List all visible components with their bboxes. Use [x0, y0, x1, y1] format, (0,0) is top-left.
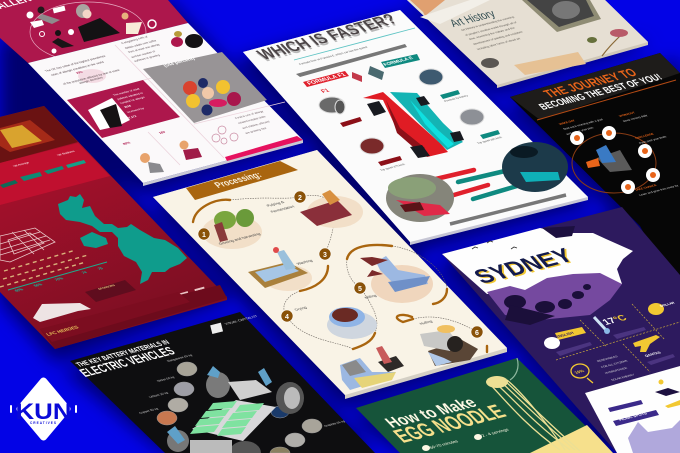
art history text: development of painting and sculpture [472, 30, 524, 46]
white map silhouette [442, 228, 633, 294]
language tag: english: ENGLISH [554, 331, 575, 339]
bottom right illustration and text [212, 110, 271, 144]
panel: processing [153, 150, 507, 399]
green axis and stats: 60% [13, 287, 25, 293]
sponsors box: SPONSORS [97, 284, 116, 291]
light bulb [571, 364, 593, 383]
step 4: drying [281, 305, 377, 339]
text block: prevalence: 20% [75, 70, 84, 75]
temperature: 17°C [600, 314, 630, 327]
heading: how to make: How to Make [381, 394, 481, 431]
step 2: pulping and fermentation: Fermentation [269, 204, 295, 214]
lower text [634, 132, 680, 197]
step 6: hulling machine: 6 [475, 330, 479, 337]
step 6: hulling machine: Hulling [418, 319, 434, 326]
material labels [138, 353, 346, 428]
lower text: CHALLENGE [634, 132, 655, 140]
green axis and stats [8, 262, 107, 293]
red stats band: UK Average [12, 161, 30, 168]
thin route lines [230, 195, 477, 349]
tag captions: Top speed 375 km/h [379, 162, 406, 172]
step 4: drying: 4 [285, 314, 289, 321]
green axis and stats: 56% [32, 282, 44, 288]
formula e label: FORMULA E [382, 56, 416, 67]
intro text: Keep moving daily [622, 114, 649, 123]
pink accent strip [225, 136, 303, 161]
coin and currency: DOLLAR [659, 301, 676, 308]
journey circle with icons [570, 126, 660, 194]
purple mountains [487, 273, 622, 320]
material labels: Copper 50 kg [138, 407, 159, 415]
crimson stats box [67, 80, 180, 138]
crimson stats box: increased by [126, 106, 146, 114]
white body [28, 23, 303, 183]
lower text: Push past your limits [638, 135, 668, 145]
text block: prevalence: The UK has some of the highest prevalence [44, 54, 107, 73]
tag captions: Powered by battery [443, 94, 470, 103]
art history text: Art History is understanding the meaning [460, 15, 515, 32]
bottom stat 160: 160 [158, 130, 166, 135]
step 5: milling machine: Milling [363, 293, 378, 300]
renewable energy text [596, 355, 636, 382]
photo: formula e car [502, 142, 568, 192]
textured header [510, 53, 680, 120]
bottom strip: lfc heroes [40, 285, 227, 349]
intro text: WAKE DAY [558, 119, 576, 126]
city buildings [628, 420, 680, 453]
head icons [171, 31, 203, 48]
panel: allergy infographic [0, 0, 303, 186]
heading ribbon: Processing: [212, 171, 265, 190]
renewable energy text: SOLAR ENERGY [610, 373, 636, 382]
qantas plane [633, 335, 675, 365]
material samples [157, 362, 322, 453]
step 4: drying: Drying [293, 305, 308, 312]
picnic spots: PICNIC SPOTS [617, 411, 648, 422]
brown route arcs [193, 200, 487, 352]
panel: how to make egg noodle [356, 358, 613, 453]
noodle head and fork [486, 358, 518, 388]
servings [474, 427, 511, 440]
renewable energy text: RENEWABLES [596, 355, 619, 363]
beetle [481, 58, 499, 68]
44 percent text: British adults now suffer [124, 39, 157, 50]
white lower section [585, 366, 680, 453]
44 percent text: sufferers is growing [133, 53, 161, 63]
material labels: Graphite 66 kg [323, 420, 346, 428]
bottom strip: lfc heroes: LFC HEROES [45, 325, 81, 337]
round photo thumbnails [319, 69, 484, 154]
crimson stats box: The number of adult [112, 87, 141, 97]
divider lines [68, 45, 285, 165]
sydney title: SYDNEY [471, 245, 581, 289]
red stats band: UK Stadiums [56, 149, 76, 157]
bottom right illustration and text: are growing fast [244, 126, 267, 135]
island and plane icons [655, 380, 680, 408]
step 1: growing and harvesting: 1 [202, 232, 206, 239]
art history text: of people's creative works through all of [464, 21, 518, 37]
logo: kun creatives [10, 381, 77, 437]
step 3: washing: 3 [323, 252, 327, 259]
grey patients box [143, 52, 267, 123]
logo: kun creatives: KUN [16, 399, 72, 424]
44 percent text: from at least one allergy [127, 43, 161, 54]
text block: prevalence: allergic disorders [78, 76, 104, 85]
intro text: Start each morning with a goal [562, 118, 604, 131]
crowd silhouette [33, 303, 91, 322]
title: WHICH IS FASTER? [253, 11, 401, 63]
time: 60-70 minutes [428, 439, 460, 450]
sponsors box [85, 280, 136, 302]
crimson stats box: 27,172 [126, 114, 138, 120]
step 3: washing [248, 247, 331, 291]
heading: egg noodle: EGG NOODLE [388, 401, 512, 447]
44 percent text: A staggering 44% of [120, 35, 149, 45]
material labels: Lithium 10 kg [148, 391, 169, 399]
formula f1 label: FORMULA F1 [306, 72, 348, 86]
panel: which is faster [243, 10, 588, 245]
text block: prevalence [44, 54, 121, 86]
panel: art history [407, 0, 648, 88]
publisher logo: VISUAL CAPITALIST [224, 314, 259, 326]
pressed flower [587, 29, 628, 56]
coin and currency [648, 301, 676, 315]
stadium photo header [0, 106, 78, 163]
44 percent text: and the number of [130, 50, 156, 59]
text block: prevalence: rates of allergic conditions in the world [50, 60, 105, 77]
green axis and stats: 70% [53, 276, 65, 282]
green axis and stats: 75 [96, 266, 105, 271]
yellow lower band [530, 425, 613, 453]
publisher logo [210, 314, 259, 334]
bottom right illustration and text: related hospital visits [237, 115, 267, 125]
UK map [58, 194, 187, 284]
orange rule [537, 80, 676, 120]
bottom stat 80 percent: 80% [122, 141, 132, 146]
qantas plane: QANTAS [644, 351, 662, 358]
checkered flags [352, 66, 384, 82]
heading ribbon [186, 161, 298, 200]
grey patients box: (544 percent) [162, 56, 197, 68]
open book [514, 52, 586, 75]
bottom stat 160 [158, 130, 202, 160]
art history text [460, 15, 524, 51]
intro text and grey bar [296, 44, 407, 77]
step 2: pulping and fermentation: 2 [298, 195, 302, 202]
language tag: english [544, 327, 592, 356]
light bulb: 10% [573, 369, 585, 375]
sydney title: SYDNEY [469, 244, 579, 288]
crimson stats box: patients admitted to [116, 91, 144, 101]
44 percent text [120, 35, 161, 63]
bottom stat 80 percent [122, 141, 164, 173]
red speed pills [423, 170, 488, 197]
panel: UK sports stadium infographic [0, 106, 227, 349]
tag captions: Top speed 280 km/h [476, 135, 503, 145]
torn paper and leaf [410, 0, 490, 24]
small tags [340, 90, 500, 166]
text block: prevalence: of the population affected by one or more [62, 68, 121, 86]
step 2: pulping and fermentation: Pulping & [265, 200, 286, 208]
noodle bundle [488, 378, 580, 451]
title underline [294, 28, 415, 60]
step 5: milling machine [354, 256, 433, 303]
formula f1 label: F1 [320, 88, 332, 94]
battery pack [190, 400, 276, 441]
framed photo [522, 0, 601, 32]
step 2: pulping and fermentation [265, 190, 363, 228]
picnic spots [608, 400, 659, 426]
sheet thickness [143, 140, 303, 186]
renewable energy text: FOR ALL CITIZENS [600, 359, 629, 369]
heading: art history: Art History [445, 7, 500, 29]
tag captions [379, 94, 503, 172]
crimson stats box: 2015 [123, 104, 132, 109]
panel: key battery materials [70, 312, 375, 453]
heading: the journey to: THE JOURNEY TO [540, 66, 640, 100]
step 1: growing and harvesting [198, 209, 262, 249]
formula f1 label [303, 71, 349, 94]
crimson header [0, 0, 188, 63]
lower text: Learn and grow from every try [638, 184, 680, 197]
birds [472, 241, 517, 249]
lower text: TAKE CHANCE [634, 183, 658, 192]
art history text: including other forms of visual art [476, 37, 521, 51]
material labels: Manganese 60 kg [166, 353, 193, 363]
heading: key battery materials: THE KEY BATTERY MATERIALS IN [74, 338, 172, 368]
packing machines [340, 346, 404, 390]
dashed dividers [556, 304, 680, 372]
heading: electric vehicles: ELECTRIC VEHICLES [76, 344, 178, 379]
intro text [558, 111, 649, 136]
green axis and stats: 74 [80, 270, 89, 275]
map island tips [542, 226, 575, 238]
step 3: washing: Washing [295, 258, 314, 266]
wheels and drivetrain [167, 366, 304, 453]
intro text: and review your plan [565, 126, 595, 136]
red stats band [0, 143, 110, 205]
bottom note bar [450, 195, 566, 224]
material labels: Nickel 60 kg [156, 375, 176, 383]
panel: becoming the best of you [510, 53, 680, 300]
team columns [80, 286, 210, 322]
photo: red f1 car [386, 174, 454, 222]
logo: kun creatives: CREATIVES [30, 421, 57, 425]
palm silhouettes [504, 284, 591, 325]
bottom right illustration and text: Food is one of allergy [234, 110, 265, 120]
teal speed pills [458, 171, 517, 199]
renewable energy text: HYDROPOWER [604, 366, 629, 375]
step 1: growing and harvesting: Growing and harvesting [217, 232, 262, 246]
car top view [363, 92, 464, 158]
panel: sydney [442, 207, 680, 453]
title: WHICH IS FASTER? [254, 13, 402, 65]
intro text: WORKOUT [618, 111, 636, 118]
step 5: milling machine: 5 [358, 286, 362, 293]
crimson stats box: hospital for allergic [119, 95, 146, 105]
seating dots [0, 250, 88, 287]
servings: 2 - 4 servings [480, 427, 511, 438]
stadium line drawing [0, 228, 55, 262]
step 6: hulling machine [418, 319, 483, 366]
bottom right illustration and text: and children affected [241, 120, 271, 130]
art history text: time, examining the culture and the [468, 26, 516, 41]
temperature [594, 314, 646, 339]
intro text and grey bar: Formula One vs Formula E, which car has the speed [298, 45, 369, 66]
